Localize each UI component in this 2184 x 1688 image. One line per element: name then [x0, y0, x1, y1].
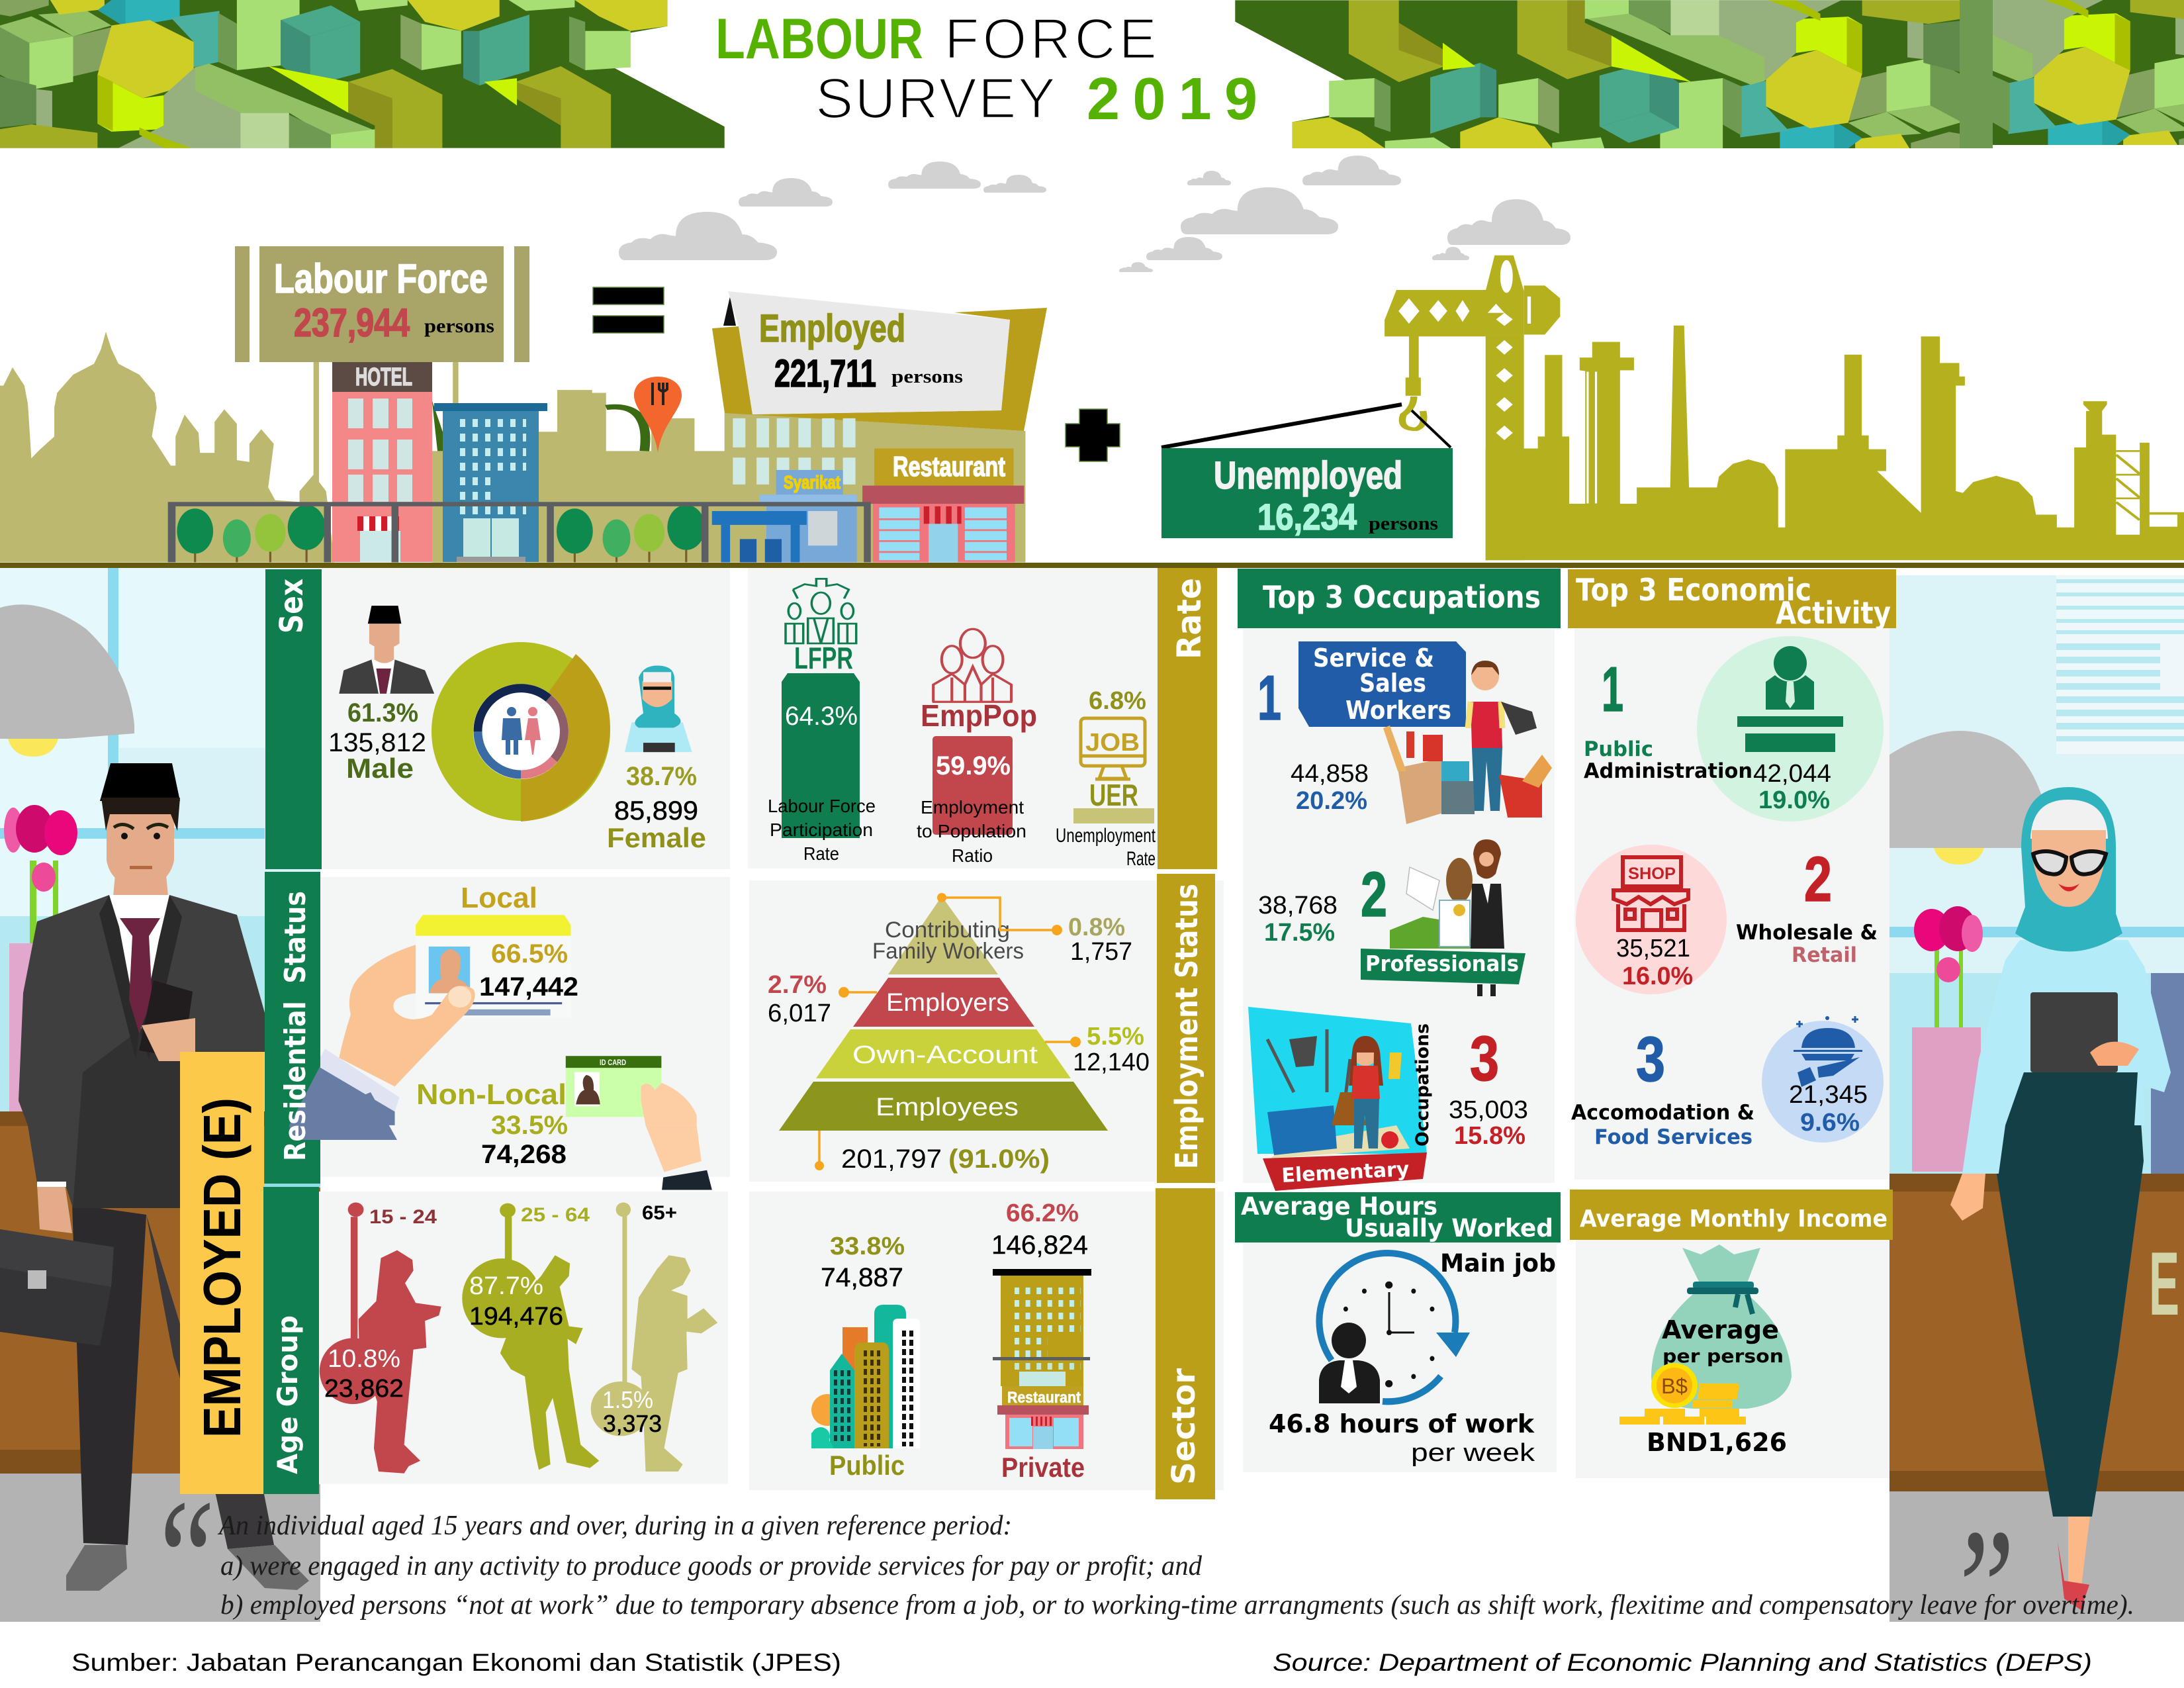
- occupation 3: elementary: 15.8%: [1454, 1122, 1525, 1150]
- icon: job monitor: [1081, 718, 1145, 779]
- hand and cuff: [646, 1125, 712, 1190]
- label: employment to population ratio: [917, 797, 1026, 866]
- activity 2: wholesale and retail: SHOP: [1628, 865, 1676, 883]
- icon: emppop group of people: [933, 629, 1013, 702]
- panel: residential status: [291, 877, 730, 1190]
- bar: lfpr: [782, 673, 860, 838]
- icon: money bag with coins: Average: [1662, 1315, 1779, 1344]
- tab: sector: Sector: [1165, 1368, 1203, 1485]
- panel: average hours usually worked: Usually Worked: [1345, 1214, 1553, 1243]
- value: contributing family workers: 0.8%: [1068, 914, 1125, 941]
- illustration: cleaning tools: [1248, 1007, 1427, 1158]
- panel: average monthly income: [1570, 1190, 1893, 1478]
- panel: top 3 economic activity: [1568, 569, 1896, 1180]
- labour force sign: persons: [424, 315, 494, 337]
- value: employees: 201,797: [841, 1145, 942, 1174]
- crane and factory skyline: [1385, 256, 2184, 560]
- panel: age group: 194,476: [469, 1303, 563, 1331]
- value: own-account: 12,140: [1073, 1049, 1150, 1076]
- definition text: An individual aged 15 years and over, during in a given reference period:: [217, 1511, 1012, 1541]
- title: FORCE: [944, 7, 1157, 71]
- footer: source english: Source: Department of Economic Planning and Statistics (DEPS): [1273, 1649, 2092, 1676]
- definition text: a) were engaged in any activity to produce goods or provide services for pay or profit; and: [220, 1551, 1203, 1581]
- illustration: professional with money: [1390, 839, 1504, 996]
- definition text: b) employed persons “not at work” due to temporary absence from a job, or to working-time arrangments (such as shift work, flexitime and compensatory leave for overtime).: [220, 1590, 2134, 1620]
- icon: money bag with coins: per person: [1662, 1345, 1784, 1367]
- banner: right cubes: [1235, 0, 2184, 148]
- occupation 1: service and sales workers: Workers: [1345, 696, 1451, 725]
- panel: average hours usually worked: Average Hours: [1241, 1192, 1437, 1221]
- figure: man in suit: [0, 763, 309, 1591]
- arithmetic sign: equals: [593, 287, 664, 333]
- values: public: Public: [829, 1450, 905, 1481]
- icon: money bag with coins: [1619, 1244, 1792, 1425]
- occupation 1: service and sales workers: 1: [1257, 663, 1281, 733]
- label: employment to population ratio: to Population: [917, 821, 1026, 841]
- scene: left office background: [0, 568, 320, 1622]
- activity 2: wholesale and retail: [1576, 844, 1878, 994]
- activity 2: wholesale and retail: 16.0%: [1622, 962, 1693, 990]
- label: unemployment rate: Unemployment: [1056, 825, 1156, 847]
- footer: source malay: Sumber: Jabatan Perancangan Ekonomi dan Statistik (JPES): [71, 1649, 841, 1676]
- text: 65+: 65+: [642, 1202, 677, 1224]
- pyramid chart: Employees: [876, 1094, 1019, 1121]
- label: id card: ID CARD: [600, 1058, 626, 1067]
- value: uer: 6.8%: [1089, 687, 1146, 715]
- value: employers: [768, 971, 831, 1027]
- label: Syarikat: Syarikat: [784, 472, 841, 492]
- sleeve: [291, 1092, 397, 1140]
- text: female: 38.7%: [626, 762, 697, 791]
- fence and trees: [168, 502, 871, 563]
- icon: clock with worker: [1319, 1253, 1470, 1403]
- occupation 1: service and sales workers: 44,858: [1291, 760, 1369, 788]
- employed sign: 221,711: [774, 352, 876, 395]
- occupation 2: professionals: 38,768: [1258, 892, 1338, 919]
- employed sign: Employed: [759, 307, 905, 350]
- crane scaffold: [2116, 451, 2140, 520]
- activity 1: public administration: 42,044: [1753, 760, 1831, 788]
- activity 3: accommodation and food services: Accomodation &: [1571, 1101, 1754, 1125]
- labour force sign: [235, 246, 529, 362]
- tab: residential status: Residential Status: [279, 891, 312, 1161]
- value: lfpr: 64.3%: [785, 702, 858, 731]
- activity 3: accommodation and food services: [1571, 1016, 1884, 1149]
- icon: female bust: [625, 666, 692, 752]
- occupation 3: elementary: [1248, 1007, 1528, 1191]
- tab: age group: [263, 1187, 319, 1494]
- company and restaurant buildings: [712, 418, 1024, 563]
- activity 1: public administration: Administration: [1584, 759, 1752, 783]
- panel: average hours usually worked: Main job: [1440, 1249, 1556, 1278]
- activity 3: accommodation and food services: 21,345: [1789, 1081, 1868, 1109]
- activity 2: wholesale and retail: 2: [1804, 844, 1832, 915]
- icon: private building: Restaurant: [1007, 1389, 1081, 1407]
- occupation 3: elementary: 3: [1470, 1023, 1499, 1094]
- activity 1: public administration: Public: [1584, 737, 1653, 761]
- values: 65+: 1.5%: [602, 1386, 653, 1413]
- unemployed sign: persons: [1369, 514, 1438, 534]
- label: employment to population ratio: Employment: [921, 797, 1024, 818]
- donut chart: male and female: [432, 642, 610, 821]
- tab: sector: [1156, 1188, 1215, 1499]
- panel: average monthly income: BND1,626: [1647, 1428, 1787, 1457]
- tab: rate: [1158, 568, 1217, 869]
- hotel building: [332, 362, 432, 562]
- values: 25-64: 87.7%: [469, 1272, 543, 1300]
- icon: male bust: [339, 606, 434, 694]
- value: contributing family workers: [1068, 914, 1132, 966]
- label: labour force participation rate: [768, 796, 876, 864]
- employed sign: [712, 291, 1047, 431]
- silhouette: 25-64: [462, 1203, 599, 1470]
- panel: sector: [749, 1192, 1224, 1490]
- value: employees: (91.0%): [948, 1145, 1050, 1174]
- title: LABOUR: [715, 7, 923, 71]
- yellow label: employed: EMPLOYED (E): [193, 1098, 251, 1438]
- value: own-account: 5.5%: [1087, 1023, 1144, 1051]
- icon: money bag with coins: B$: [1661, 1374, 1688, 1398]
- panel: residential status: 66.5%: [491, 939, 568, 968]
- divider bar: [0, 563, 2184, 568]
- panel: top 3 economic activity: Activity: [1776, 595, 1891, 631]
- activity 3: accommodation and food services: 3: [1636, 1024, 1665, 1095]
- panel: rate: [748, 568, 1158, 870]
- icon: id card with hand: [566, 1056, 697, 1125]
- value: employees: [841, 1145, 1050, 1174]
- icon: map pin restaurant: [634, 377, 682, 453]
- title: [715, 7, 1257, 132]
- values: private: 146,824: [991, 1231, 1088, 1260]
- panel: residential status: 74,268: [481, 1140, 567, 1169]
- activity 1: public administration: [1584, 636, 1884, 821]
- unemployed sign: [1161, 404, 1453, 538]
- figure: woman with tablet: [1950, 787, 2171, 1610]
- connectors: [815, 893, 1081, 1170]
- value: emppop: 59.9%: [936, 751, 1011, 780]
- quote mark: closing: ”: [1946, 1494, 2015, 1685]
- panel: top 3 occupations: Top 3 Occupations: [1263, 579, 1541, 615]
- hotel building: HOTEL: [355, 363, 412, 391]
- icon: private building: [993, 1269, 1091, 1449]
- pyramid chart: Employers: [886, 989, 1009, 1017]
- unemployed sign: 16,234: [1257, 496, 1357, 538]
- title: 2019: [1087, 66, 1257, 132]
- icon: hand holding local id card: [293, 915, 571, 1125]
- panel: top 3 occupations: [1238, 569, 1561, 1191]
- quote mark: opening: “: [147, 1464, 216, 1655]
- silhouette: 65+: [591, 1203, 717, 1472]
- activity 2: wholesale and retail: 35,521: [1616, 935, 1690, 962]
- text: 25-64: 25 - 64: [521, 1204, 590, 1226]
- panel: average hours usually worked: per week: [1411, 1439, 1535, 1467]
- values: private: 66.2%: [1006, 1199, 1079, 1227]
- label: unemployment rate: Rate: [1126, 848, 1156, 870]
- values: 15-24: 10.8%: [328, 1345, 400, 1373]
- bar: uer: [1073, 808, 1154, 823]
- activity 1: public administration: 19.0%: [1758, 786, 1830, 814]
- label: labour force participation rate: Rate: [803, 843, 839, 864]
- value: contributing family workers: 1,757: [1070, 938, 1132, 966]
- values: private: Private: [1001, 1452, 1085, 1483]
- scene: right office background: [1889, 575, 2184, 1622]
- text: male: 61.3%: [347, 698, 418, 727]
- tab: sex: [265, 569, 322, 869]
- occupation 1: service and sales workers: Sales: [1359, 669, 1426, 698]
- activity 3: accommodation and food services: Food Services: [1594, 1125, 1752, 1149]
- labour force sign: 237,944: [294, 301, 410, 345]
- occupation 2: professionals: 17.5%: [1264, 919, 1335, 947]
- label: Restaurant: Restaurant: [893, 451, 1005, 482]
- pyramid chart: Family Workers: [872, 939, 1024, 964]
- value: own-account: [1073, 1023, 1150, 1076]
- clouds: [619, 156, 1570, 272]
- text: 15-24: 15 - 24: [369, 1206, 437, 1228]
- panel: residential status: 33.5%: [491, 1111, 568, 1140]
- values: public: 74,887: [821, 1263, 903, 1292]
- panel: average monthly income: Average Monthly Income: [1580, 1205, 1888, 1233]
- occupation 1: service and sales workers: 20.2%: [1296, 787, 1367, 815]
- silhouette: 15-24: [320, 1203, 441, 1474]
- text: non-local: Non-Local: [416, 1078, 567, 1111]
- panel: top 3 economic activity: Top 3 Economic: [1576, 572, 1811, 608]
- text: lfpr: LFPR: [794, 641, 853, 675]
- occupation 2: professionals: Professionals: [1365, 951, 1519, 976]
- employed sign: persons: [891, 367, 963, 387]
- panel: residential status: 147,442: [479, 972, 578, 1002]
- occupation 1: service and sales workers: [1257, 641, 1552, 824]
- icon: job monitor: JOB: [1085, 729, 1140, 757]
- labour force sign: Labour Force: [274, 256, 488, 302]
- label: labour force participation rate: Participation: [770, 820, 873, 840]
- value: employers: 2.7%: [768, 971, 827, 999]
- activity 2: wholesale and retail: Retail: [1792, 943, 1857, 967]
- activity 2: wholesale and retail: Wholesale &: [1736, 921, 1878, 945]
- title: SURVEY: [815, 67, 1056, 130]
- unemployed sign: Unemployed: [1214, 454, 1402, 497]
- tab: employment status: [1157, 874, 1215, 1183]
- banner: left cubes: [0, 0, 725, 148]
- arithmetic sign: plus: [1066, 409, 1120, 461]
- icon: lfpr people with gear: [786, 579, 856, 643]
- occupation 1: service and sales workers: Service &: [1313, 643, 1434, 673]
- tab: age group: Age Group: [271, 1315, 304, 1474]
- occupation 2: professionals: 2: [1361, 859, 1387, 930]
- pyramid chart: Own-Account: [852, 1041, 1038, 1069]
- panel: age group: 3,373: [603, 1410, 662, 1437]
- label: labour force participation rate: Labour Force: [768, 796, 876, 816]
- panel: age group: 23,862: [324, 1375, 404, 1403]
- values: private: [991, 1199, 1088, 1483]
- occupation 2: professionals: [1258, 839, 1525, 996]
- panel: employment status: [749, 880, 1224, 1182]
- tab: rate: Rate: [1170, 578, 1208, 659]
- label: unemployment rate: [1056, 825, 1156, 870]
- text: uer: UER: [1089, 778, 1138, 812]
- text: local: Local: [461, 882, 537, 914]
- icon: public city buildings: [811, 1305, 920, 1448]
- panel: average hours usually worked: [1235, 1192, 1561, 1472]
- pyramid chart: [779, 896, 1108, 1131]
- occupation 3: elementary: Occupations: [1412, 1023, 1433, 1147]
- panel: sex: Female: [607, 822, 706, 853]
- tab: residential status: [265, 872, 320, 1184]
- pyramid chart: Contributing: [885, 917, 1010, 943]
- label: employment to population ratio: Ratio: [952, 845, 993, 866]
- panel: average hours usually worked: 46.8 hours of work: [1269, 1409, 1535, 1438]
- activity 1: public administration: 1: [1602, 654, 1623, 725]
- tab: employment status: Employment Status: [1169, 884, 1205, 1169]
- sleeve over tab: [289, 1066, 320, 1140]
- blue office building: [434, 403, 547, 562]
- illustration: shopper and groceries: [1383, 661, 1552, 824]
- text: emppop: EmpPop: [921, 698, 1037, 733]
- occupation 3: elementary: Elementary: [1281, 1158, 1410, 1188]
- bar: emppop: [933, 736, 1013, 835]
- panel: sex: [322, 568, 730, 869]
- city skyline left: [0, 332, 1025, 563]
- activity 3: accommodation and food services: 9.6%: [1800, 1109, 1860, 1137]
- yellow label: employed: [180, 1052, 264, 1494]
- panel: age group: [319, 1192, 728, 1484]
- panel: sex: Male: [346, 753, 414, 784]
- value: employers: 6,017: [768, 1000, 831, 1027]
- tab: sex: Sex: [273, 579, 310, 633]
- definition text: [217, 1511, 2134, 1620]
- panel: sex: 85,899: [614, 796, 698, 825]
- panel: sex: 135,812: [328, 728, 426, 757]
- values: public: [821, 1233, 905, 1481]
- values: public: 33.8%: [830, 1233, 905, 1260]
- occupation 3: elementary: 35,003: [1449, 1096, 1528, 1124]
